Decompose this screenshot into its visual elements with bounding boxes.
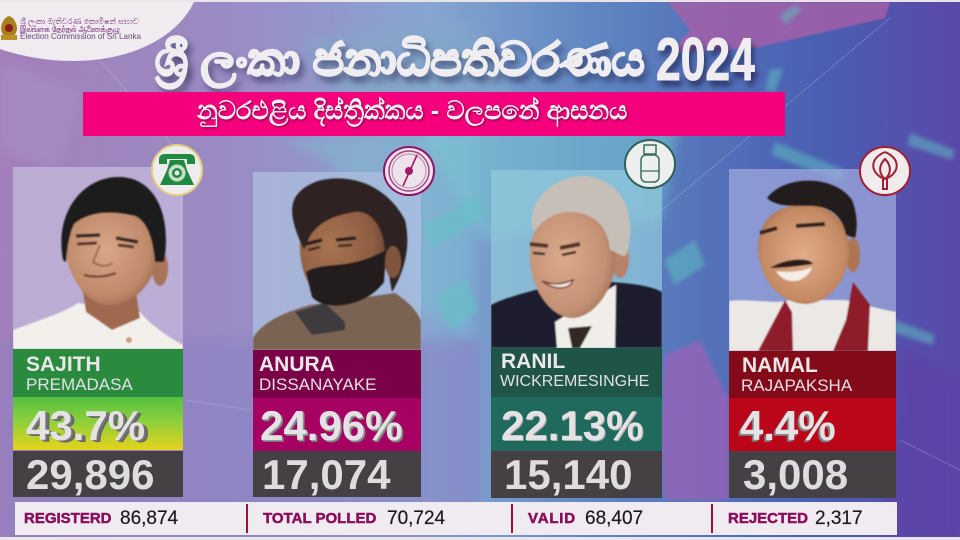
logo badge: Election Commission of Sri Lanka: இலங்கை தேர்தல் ஆணைக்குழு — [20, 25, 120, 34]
name band: WICKREMESINGHE — [500, 373, 649, 390]
icon: lotus bud symbol — [859, 146, 911, 196]
vote count: 3,008 — [743, 451, 848, 498]
vote count: 15,140 — [504, 451, 632, 498]
title: ශ්‍රී ලංකා ජනාධිපතිවරණය — [155, 33, 645, 85]
icon: telephone symbol — [151, 144, 203, 196]
panel: Sajith Premadasa — [13, 144, 203, 498]
vote count: 29,896 — [26, 451, 154, 498]
rejected votes: REJECTED — [728, 510, 808, 527]
name band — [253, 350, 421, 398]
rejected votes: 2,317 — [815, 508, 863, 529]
vote percentage: 24.96% — [260, 402, 402, 449]
icon: gas cylinder symbol — [624, 139, 676, 189]
name band: RANIL — [501, 350, 565, 373]
total polled: TOTAL POLLED — [263, 510, 376, 527]
name band — [729, 351, 896, 398]
valid votes — [511, 504, 663, 533]
panel: Namal Rajapaksha — [729, 146, 911, 498]
name band: PREMADASA — [26, 375, 133, 394]
logo badge: Election Commission of Sri Lanka — [0, 2, 194, 61]
name band: SAJITH — [26, 353, 101, 376]
valid votes: VALID — [528, 510, 576, 527]
total polled — [246, 504, 448, 533]
title — [154, 26, 760, 93]
vote percentage: 4.4% — [740, 402, 836, 449]
rejected votes — [711, 504, 883, 533]
name band — [491, 348, 662, 397]
panel: Anura Dissanayake — [253, 146, 435, 498]
logo badge: Election Commission of Sri Lanka: ශ්‍රී ලංකා මැතිවරණ කොමිෂන් සභාව — [20, 17, 139, 26]
name band: ANURA — [259, 353, 335, 376]
vote count: 17,074 — [262, 451, 390, 498]
footer statistics bar — [15, 502, 897, 535]
subtitle banner — [83, 92, 785, 136]
valid votes: 68,407 — [585, 508, 643, 529]
registered voters — [24, 508, 178, 529]
total polled: 70,724 — [387, 508, 445, 529]
photo: Sajith Premadasa — [13, 167, 183, 349]
registered voters: 86,874 — [120, 508, 178, 529]
vote percentage — [13, 397, 183, 450]
name band: NAMAL — [742, 354, 818, 377]
registered voters: REGISTERD — [24, 510, 112, 527]
photo: Ranil Wickremesinghe — [491, 170, 662, 348]
panel: Ranil Wickremesinghe — [491, 139, 676, 498]
logo badge: Election Commission of Sri Lanka: Election Commission of Sri Lanka — [20, 32, 141, 41]
icon: compass symbol — [383, 146, 435, 196]
name band: DISSANAYAKE — [259, 375, 376, 394]
vote percentage — [729, 398, 896, 451]
vote percentage: 22.13% — [501, 402, 643, 449]
photo: Namal Rajapaksha — [729, 169, 896, 351]
vote percentage: 43.7% — [26, 402, 145, 449]
photo: Anura Dissanayake — [253, 172, 421, 350]
name band: RAJAPAKSHA — [741, 376, 852, 395]
vote count — [729, 451, 896, 498]
name band — [13, 349, 183, 397]
subtitle banner: නුවරඑළිය දිස්ත්‍රික්කය - වලපනේ ආසනය — [197, 97, 627, 125]
title: 2024 — [656, 26, 755, 93]
